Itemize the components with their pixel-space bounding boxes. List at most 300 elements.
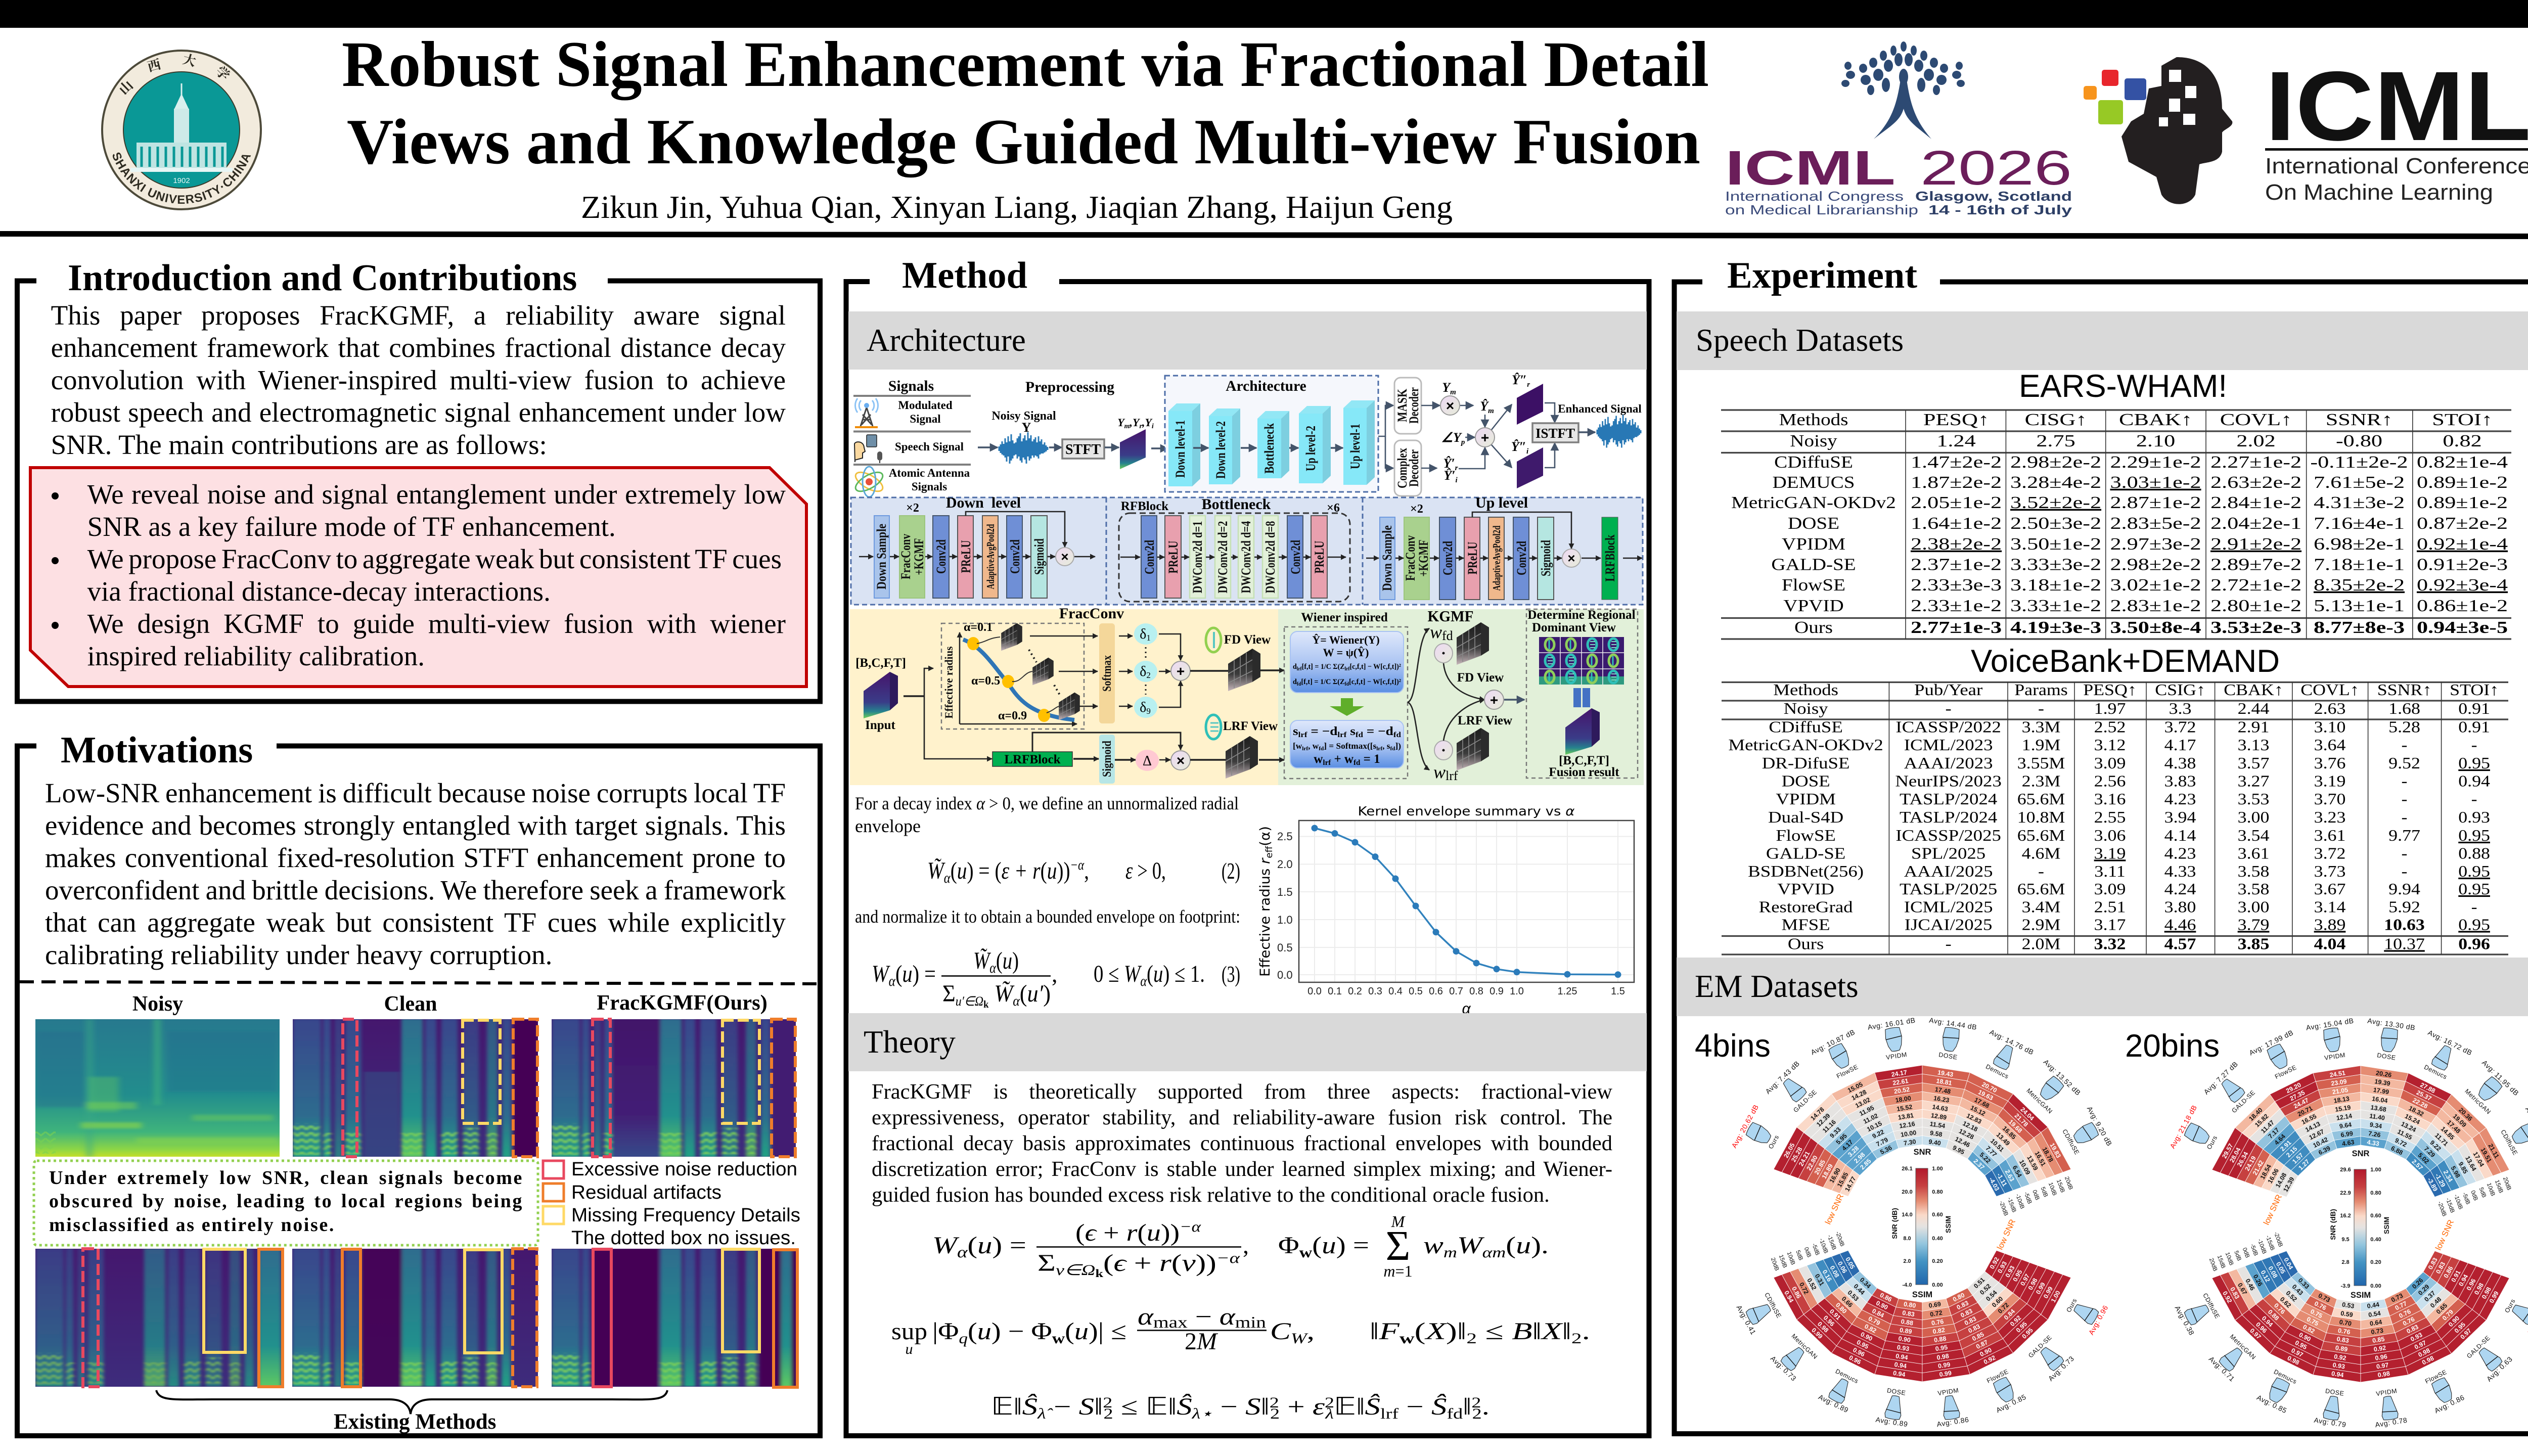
SNR half: 12.18 [1962,1120,1979,1133]
equation: approximation and stability bounds: α [1220,1303,1232,1330]
SNR half: 17.68 [1973,1096,1991,1110]
table: VoiceBank+DEMAND results: 0.95 [2458,827,2490,845]
equation: excess risk bound: ≤ [1113,1393,1146,1420]
table: VoiceBank+DEMAND results: - [2038,700,2044,718]
equation: normalized envelope (3): k [983,999,989,1010]
table: EARS-WHAM results: 0.92±3e-4 [2417,575,2508,595]
formula box: fusion weights: fd [1353,759,1361,767]
motivation paragraph: Low-SNR enhancement is difficult because noise corrupts local TF [45,778,786,808]
SNR half: 1.57 [2291,1152,2305,1165]
SSIM half: 0.76 [1931,1318,1944,1327]
SNR half: 13.81 [1898,1112,1914,1121]
SNR-level labels: low SNR [2262,1193,2284,1226]
equation: excess risk bound: 2 [1104,1405,1113,1422]
violin labels: CDiffuSE [2201,1292,2221,1320]
SNR half: 18.89 [1821,1163,1834,1180]
heading: Method [902,255,1027,296]
equation: unnormalized envelope (2): u) = (ε + r(u)) [957,857,1073,884]
SNR-level labels: -15dB [2265,1235,2276,1251]
table: EARS-WHAM results: 3.02±1e-2 [2110,575,2201,595]
table: EARS-WHAM results: Ours [1794,617,1833,636]
equation: normalized envelope (3) [872,947,1240,1010]
equation: excess risk bound: 𝔼‖Ŝ [991,1392,1034,1421]
violin labels: Avg: 0.78 [2374,1416,2408,1429]
equation: excess risk bound: 2 [1472,1405,1482,1422]
table: EARS-WHAM results: 2.77±1e-3 [1911,618,2002,637]
violin labels: Avg: 0.38 [2173,1304,2196,1337]
table: VoiceBank+DEMAND results: 10.63 [2384,916,2425,934]
SNR-level labels: 10dB [1786,1251,1796,1266]
SSIM half: 0.96 [1822,1314,1836,1328]
violin labels: VPIDM [2375,1387,2398,1397]
SNR-level labels: -20dB [1834,1231,1845,1247]
SNR half: 21.42 [2251,1159,2265,1176]
SSIM half: 0.82 [2301,1323,2316,1335]
SNR half: 16.04 [2371,1095,2388,1105]
table: VoiceBank+DEMAND results: 3.53 [2238,791,2269,808]
SSIM half: 0.31 [1814,1273,1826,1287]
table: EARS-WHAM results: 3.33±1e-2 [2010,596,2101,615]
SNR half: 5.95 [1835,1132,1848,1146]
SSIM half: 1.00 [2050,1290,2062,1304]
SSIM half: 0.85 [2372,1336,2385,1344]
SSIM half: 0.80 [1952,1292,1966,1303]
spectrogram: existing method 2 [292,1249,538,1387]
chart: kernel envelope summary: 0.6 [1429,986,1443,997]
table: VoiceBank+DEMAND results: 3.12 [2094,737,2126,754]
equation: fractional kernel and basis: −α [1180,1218,1201,1235]
diagram: architecture encoder-decoder [1165,376,1378,492]
chart: kernel envelope summary: 1.5 [1277,886,1293,898]
SNR half: 9.64 [2339,1121,2352,1130]
table: EARS-WHAM results: 3.33±3e-2 [2010,555,2101,574]
SSIM half: 0.52 [1805,1277,1818,1291]
colorbar: 0.00 [2370,1283,2381,1289]
SNR-level labels: 0dB [2031,1189,2041,1201]
violin labels: Demucs [2273,1368,2298,1385]
table: VoiceBank+DEMAND results: 9.94 [2388,881,2420,898]
arrow: down green [1330,698,1364,716]
table: EARS-WHAM results: 2.29±1e-2 [2110,452,2201,472]
SSIM half: 0.48 [2429,1296,2443,1309]
colorbar: SNR (dB) [1890,1208,1899,1239]
SSIM half: 0.97 [2248,1327,2263,1341]
violin labels: Avg: 20.62 dB [1730,1103,1760,1149]
table: VoiceBank+DEMAND results: 9.52 [2388,755,2420,772]
SNR half: 22.80 [1805,1154,1819,1172]
SSIM half: 0.76 [2313,1300,2327,1312]
SSIM half: 0.53 [1846,1289,1860,1303]
SSIM half: 0.53 [2341,1301,2355,1310]
SNR half: 2.98 [1853,1151,1867,1165]
diagram: preprocessing: Y [1117,416,1124,429]
formula box: reliability distances: W = ψ(Ŷ) [1323,646,1369,659]
SSIM half: 0.83 [2434,1261,2447,1275]
block: Complex decoder [1394,440,1421,496]
logo: Shanxi University seal: 1902 [173,176,190,185]
SNR half: 6.99 [2340,1130,2354,1139]
SSIM half: 0.86 [1879,1292,1893,1303]
SSIM half: 0.44 [2367,1301,2380,1310]
table: VoiceBank+DEMAND results: 3.58 [2238,881,2269,898]
diagram: bottleneck: DWConv2d d=4 [1239,521,1253,594]
table: VoiceBank+DEMAND results: 2.9M [2022,916,2060,934]
equation: fractional kernel and basis: ϵ + r(v)) [1114,1250,1212,1277]
SSIM half: 0.60 [1991,1295,2004,1309]
formula box: reliability distances: d [1293,663,1297,671]
panel frame [17,281,820,702]
diagram: signals column: Speech Signal [895,440,964,453]
violin labels: VPIDM [2324,1052,2346,1062]
SNR half: 16.06 [2267,1167,2280,1185]
diagram: decoders and synthesis: Enhanced Signal [1558,402,1642,415]
legend [543,1159,800,1249]
table: VoiceBank+DEMAND results: 2.91 [2238,718,2269,736]
table: VoiceBank+DEMAND results: MFSE [1782,916,1830,934]
table: EARS-WHAM results: 6.98±2e-1 [2314,534,2405,554]
table: EARS-WHAM results: PESQ↑ [1923,410,1989,429]
diagram: FracConv band: FD View [1224,633,1271,647]
equation: unnormalized envelope (2): , [1084,857,1089,884]
SSIM half: 0.98 [2377,1370,2390,1379]
violin labels: Demucs [1984,1063,2010,1080]
colorbar: 0.00 [1932,1282,1943,1288]
spectrogram: existing method 1 [35,1249,281,1387]
SNR-level labels: -20dB [2273,1231,2284,1248]
equation: normalized envelope (3): W̃ [973,947,994,974]
table: VoiceBank+DEMAND results: 2.56 [2094,772,2126,790]
SNR half: 4.33 [2367,1139,2380,1148]
SNR half: 3.28 [1846,1145,1860,1158]
diagram: up level: Sigmoid [1539,540,1553,576]
colorbar: 20.0 [1902,1189,1913,1195]
SSIM half: 0.88 [1901,1318,1914,1327]
diagram: decoders and synthesis: Ŷ [1480,399,1488,414]
table: EARS-WHAM results: 0.82±1e-4 [2417,452,2508,472]
table: EARS-WHAM results: 7.18±1e-1 [2314,555,2405,574]
SSIM half: 0.84 [2003,1308,2016,1322]
SNR half: 23.09 [2330,1078,2348,1087]
diagram: preprocessing [978,379,1168,469]
table: VoiceBank+DEMAND results: 10.37 [2384,935,2425,953]
SNR half: 12.39 [1815,1112,1831,1128]
violin labels [1730,1016,2114,1428]
SNR half: 16.51 [2034,1150,2047,1167]
equation: excess risk bound: ‖Ŝ [1356,1393,1377,1420]
table: VoiceBank+DEMAND results: 3.11 [2094,863,2126,881]
intro paragraph: robust speech and electromagnetic signal enhancement under low [51,397,786,428]
diagram: bottleneck: DWConv2d d=1 [1190,521,1205,594]
operator: multiply: × [1446,398,1454,414]
diagram: architecture encoder-decoder: Architecture [1226,378,1306,394]
violin labels: Avg: 0.63 [2485,1355,2514,1383]
SNR half: 6.54 [2011,1164,2023,1178]
SNR-level labels: 15dB [1778,1254,1788,1269]
table: VoiceBank+DEMAND results: 1.68 [2388,700,2420,718]
operator: add [1475,428,1495,447]
contributions list: via fractional distance-decay interactions. [87,576,551,607]
table: VoiceBank+DEMAND results: VPVID [1777,880,1834,898]
equation: normalized envelope (3): ( [996,947,1003,974]
table: VoiceBank+DEMAND results: RestoreGrad [1759,898,1853,916]
SSIM half: 0.87 [1975,1339,1989,1350]
violin labels: Avg: 13.52 dB [2042,1058,2083,1097]
SNR half: -1.11 [1996,1172,2008,1188]
SSIM half: 0.79 [1867,1315,1881,1327]
column labels: Noisy [132,992,183,1016]
table: VoiceBank+DEMAND results: 5.28 [2388,718,2420,736]
colorbar: 2.0 [1903,1258,1911,1264]
diagram: bottleneck: Bottleneck [1202,496,1271,513]
SNR half: 12.28 [1958,1127,1975,1141]
table: VoiceBank+DEMAND results: 3.67 [2314,881,2345,898]
SNR half: 13.49 [1995,1131,2011,1147]
table: VoiceBank+DEMAND results: MetricGAN-OKDv2 [1728,736,1883,754]
colorbar: SNR [1914,1148,1931,1157]
violin labels: Avg: 0.86 [2433,1393,2466,1415]
diagram: decoders and synthesis: m [1450,388,1456,396]
equation: excess risk bound: S‖ [1079,1393,1101,1420]
callout text: misclassified as entirely noise. [49,1214,335,1236]
chart: kernel envelope summary: eff [1264,846,1275,858]
motivation paragraph: makes conventional fixed-resolution STFT enhancement prone to [45,842,786,873]
table: VoiceBank+DEMAND results: CDiffuSE [1769,718,1843,736]
diagram: KGMF band: [B,C,F,T] [1559,754,1609,767]
SSIM half: 0.79 [2441,1308,2455,1322]
table: EARS-WHAM results: 2.10 [2136,431,2175,450]
table: VoiceBank+DEMAND results: ICML/2023 [1904,736,1993,754]
logo: ICML 2026 congress [1725,41,2072,217]
diagram: up level: ×2 [1410,503,1423,516]
equation: approximation and stability bounds: w [1400,1330,1415,1347]
violin labels: Avg: 17.99 dB [2248,1028,2294,1057]
table: EARS-WHAM results: 2.89±7e-2 [2210,555,2301,574]
SNR half: 19.83 [2048,1142,2062,1159]
table: VoiceBank+DEMAND results: 0.95 [2458,755,2490,772]
SNR half: 15.85 [1836,1171,1849,1189]
table: VoiceBank+DEMAND results: 4.6M [2022,845,2060,862]
colorbar: 22.9 [2340,1190,2351,1196]
table: EARS-WHAM results: 2.38±2e-2 [1911,534,2002,554]
equation: approximation and stability bounds: |Φ [932,1318,959,1345]
table: EARS-WHAM results: COVL↑ [2220,410,2292,429]
SNR half: 29.20 [2285,1081,2302,1095]
equation: approximation and stability bounds: 2M [1185,1328,1218,1355]
table: VoiceBank+DEMAND results: 3.06 [2094,827,2126,845]
table: EARS-WHAM results: 7.61±5e-2 [2314,473,2405,492]
SNR half: 18.78 [2041,1146,2055,1163]
SSIM half: 0.98 [2473,1282,2485,1296]
table: VoiceBank+DEMAND results: 3.83 [2164,772,2196,790]
diagram: decoders and synthesis: Ŷ″ [1511,439,1526,454]
SNR-level labels: -5dB [1811,1243,1821,1256]
violin labels: VPIDM [1885,1051,1908,1061]
table: VoiceBank+DEMAND results: 65.6M [2017,881,2065,898]
table: VoiceBank+DEMAND results: 0.95 [2458,863,2490,881]
diagram: preprocessing: Preprocessing [1025,379,1114,395]
SSIM half: 0.08 [1828,1264,1840,1279]
SSIM half: 0.99 [1810,1327,1824,1340]
SSIM half: 0.96 [1852,1346,1866,1358]
colorbar [2329,1149,2390,1300]
violin labels: MetricGAN [1790,1333,1819,1360]
table title: VoiceBank+DEMAND: VoiceBank+DEMAND [1971,644,2280,679]
spectrogram: FracKGMF [552,1019,796,1157]
SNR half: 12.16 [1899,1120,1916,1130]
SNR half: 9.95 [1952,1144,1966,1156]
table: VoiceBank+DEMAND results: 3.70 [2314,791,2345,808]
chart: kernel envelope summary: α [1462,1000,1471,1017]
table: EARS-WHAM results: 0.94±3e-5 [2417,618,2508,637]
table: VoiceBank+DEMAND results: 3.4M [2022,898,2060,916]
SNR half: 18.32 [2408,1105,2425,1118]
SNR-level labels: 0dB [2469,1190,2479,1202]
table: VoiceBank+DEMAND results: - [2038,863,2044,881]
diagram: down level: Down Sample [874,524,889,589]
SNR-level labels: 10dB [2486,1182,2496,1197]
equation: fractional kernel and basis: Σ [1037,1250,1056,1277]
SSIM half: 0.88 [2267,1308,2280,1322]
logo: ICML 2026 congress: Glasgow, Scotland [1915,189,2072,204]
equation: normalized envelope (3): (3) [1222,961,1240,987]
motivation paragraph: evidence and becomes strongly entangled with target signals. This [45,810,786,841]
table: VoiceBank+DEMAND results: 4.57 [2164,935,2196,953]
marker boxes: FracKGMF [593,1019,795,1157]
colorbar: 0.60 [2370,1213,2381,1219]
diagram: bottleneck: ×6 [1327,502,1340,515]
table: VoiceBank+DEMAND results: Dual-S4D [1768,808,1843,826]
equation: approximation and stability bounds: 2 [1571,1330,1582,1347]
theory paragraph: discretization error; FracConv is stable under learned simplex mixing; and Wiener- [872,1157,1612,1181]
chart: kernel envelope summary: Effective radius r [1257,858,1273,977]
colorbar: 0.80 [1932,1189,1943,1195]
formula box: fusion weights: lrf [1337,731,1347,739]
equation: excess risk bound: 2 [1471,1394,1481,1411]
equation: approximation and stability bounds: ≤ [1477,1318,1512,1345]
table: VoiceBank+DEMAND results: 3.85 [2238,935,2269,953]
table: EARS-WHAM results: Noisy [1790,431,1837,450]
equation: fractional kernel and basis: ( [968,1232,977,1259]
table: VoiceBank+DEMAND results: 0.93 [2458,809,2490,827]
SSIM half: 0.54 [2368,1310,2381,1318]
logo: ICML wordmark: On Machine Learning [2265,180,2493,205]
diagram: decoders and synthesis: m [1488,407,1494,415]
operator: add: + [1481,430,1489,445]
equation: approximation and stability bounds: − [1188,1303,1220,1330]
equation: normalized envelope (3): u) = [902,961,940,987]
table: VoiceBank+DEMAND results: PESQ↑ [2083,681,2137,699]
diagram: up level: Conv2d [1514,541,1529,575]
SNR half: 15.19 [2334,1104,2351,1113]
SSIM half: 0.89 [2335,1344,2348,1353]
SSIM half: 0.97 [2290,1347,2304,1358]
SNR half: 7.30 [1903,1138,1916,1147]
section bar: speech datasets: Speech Datasets [1696,323,1904,358]
table: VoiceBank+DEMAND results: 3.19 [2094,845,2126,862]
diagram: decoders and synthesis: i [1456,476,1458,484]
SSIM half: 0.54 [1984,1289,1999,1303]
logo: Shanxi University seal: SHANXI UNIVERSITY·CHINA [112,153,251,204]
table: VoiceBank+DEMAND results: 3.23 [2314,809,2345,827]
violin labels: Ours [1767,1134,1780,1150]
colorbar: SSIM [1944,1216,1952,1233]
block: Bottleneck [1257,411,1289,478]
table: EARS-WHAM results: VPIDM [1782,534,1845,553]
violin labels: Avg: 0.86 [1936,1416,1969,1428]
SNR-level labels: 0dB [1803,1246,1812,1258]
SSIM half: 0.73 [2371,1327,2384,1336]
SSIM half: 0.65 [2435,1302,2449,1315]
table: VoiceBank+DEMAND results: - [2402,737,2407,754]
SSIM half: 0.96 [1848,1354,1862,1366]
table: EARS-WHAM results: 2.63±2e-2 [2210,473,2301,492]
SSIM half: 0.94 [1783,1290,1795,1304]
heading: Experiment [1727,255,1917,296]
violin labels: Avg: 7.27 dB [2202,1060,2239,1096]
SSIM half: 0.93 [1996,1260,2008,1275]
diagram: KGMF band: Wiener inspired [1301,611,1388,624]
SNR half: 14.08 [2274,1172,2288,1189]
SSIM half: 0.96 [2254,1321,2268,1335]
table: EARS-WHAM results: 2.05±1e-2 [1911,493,2002,512]
table: VoiceBank+DEMAND results: Noisy [1784,700,1828,717]
table: EARS-WHAM results: 1.87±2e-2 [1911,473,2002,492]
table: VoiceBank+DEMAND results: 0.95 [2458,916,2490,934]
colorbar: 0.60 [1932,1212,1943,1218]
theory paragraph: expressiveness, operator stability, and reliability-aware fusion risk control. The [872,1106,1612,1129]
theory paragraph: guided fusion has bounded excess risk relative to the conditional oracle fusion. [872,1183,1550,1207]
SNR half: 7.79 [1875,1136,1889,1148]
callout text: Under extremely low SNR, clean signals become [49,1167,523,1188]
diagram: preprocessing: m [1124,423,1130,430]
table: EARS-WHAM results: 3.50±8e-4 [2110,618,2201,637]
table: VoiceBank+DEMAND results: - [1945,935,1952,953]
SSIM half: 0.92 [2333,1353,2347,1362]
diagram: decoders and synthesis: Ŷ″ [1512,373,1527,387]
violin labels: DOSE [2376,1052,2397,1062]
violin labels: Avg: 21.18 dB [2168,1104,2198,1150]
table: EARS-WHAM results: 0.82 [2443,431,2482,450]
violin labels: MetricGAN [2463,1087,2492,1116]
block: MASK decoder: Decoder [1407,387,1421,424]
SNR half: 9.34 [2369,1121,2382,1130]
contributions list: We propose FracConv to aggregate weak but consistent TF cues [87,543,782,574]
icon: LRF spiral [1206,715,1221,739]
SSIM half: 0.52 [2284,1290,2298,1303]
panel frame [1675,282,2528,1434]
table: EARS-WHAM results: 8.77±8e-3 [2314,618,2405,637]
violin labels: VPIDM [1937,1387,1959,1397]
equation: normalized envelope (3): ( [1147,961,1153,987]
equation: normalized envelope (3): u′) [1027,980,1051,1007]
SNR half: 17.48 [1934,1086,1951,1095]
panel: motivations [15,730,823,1438]
table: VoiceBank+DEMAND results: - [2402,863,2407,881]
table: EARS-WHAM results: 1.24 [1936,431,1976,450]
table: VoiceBank+DEMAND results: 3.19 [2314,772,2345,790]
table: VoiceBank+DEMAND results: 4.24 [2164,881,2196,898]
table: VoiceBank+DEMAND results: 3.32 [2094,935,2126,953]
equation: excess risk bound: 2 [1270,1394,1279,1411]
table: VoiceBank+DEMAND results: IJCAI/2025 [1905,916,1992,934]
table: VoiceBank+DEMAND results: 3.58 [2238,863,2269,881]
diagram: up level [1366,494,1642,600]
colorbar: 2.8 [2341,1259,2350,1265]
table: VoiceBank+DEMAND results: 3.09 [2094,755,2126,772]
SSIM half: 0.98 [2421,1354,2435,1367]
equation: excess risk bound: λ̂ [1037,1405,1054,1422]
SNR half: 11.71 [2433,1131,2450,1148]
